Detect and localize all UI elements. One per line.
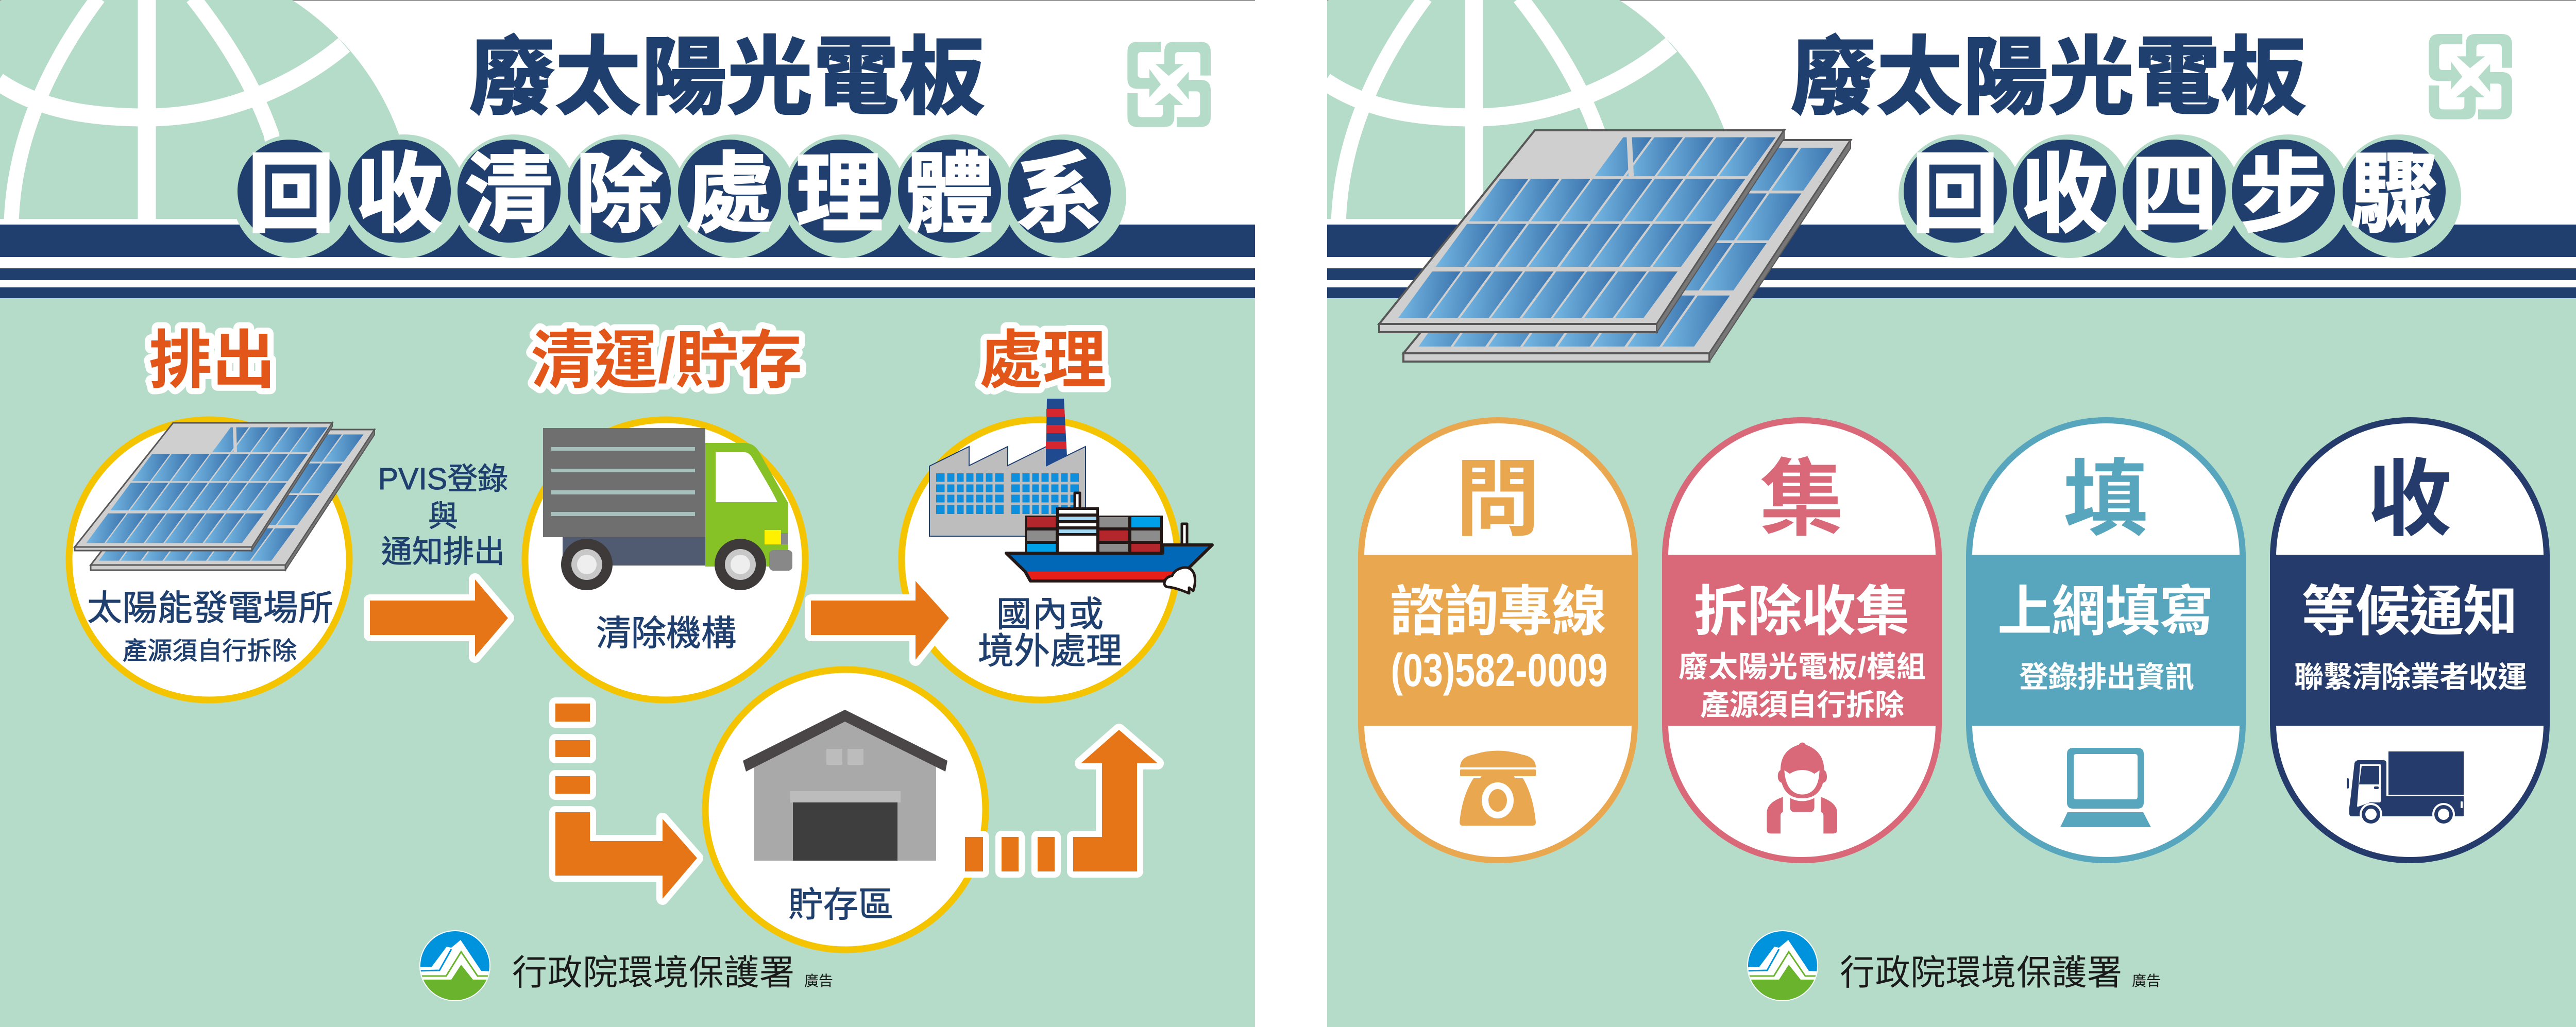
globe background [1206,0,1742,493]
heading: treatment: 處理 [979,326,1106,396]
heading: circular letters: 系 [1015,146,1103,244]
agency name: 行政院環境保護署 [1840,953,2122,992]
label: clearance: 清除機構 [596,614,736,653]
text: PVIS registration [378,462,508,569]
text: PVIS registration: PVIS登錄 [378,462,508,496]
card heading: 等候通知 [2301,581,2518,642]
card: collect (dismantle and collect) [1662,420,1942,860]
node: domestic or overseas treatment [902,399,1212,700]
footer: agency logo and name [1747,930,2161,1002]
icon: EPA logo [1747,930,1819,1002]
heading: circular letters: 處 [686,146,773,244]
heading: circular letters: 回 [1911,146,1999,244]
heading: transport and storage: 清運/貯存 [531,326,802,396]
icon: telephone [1460,751,1536,826]
heading: circular letters: 四 [2130,146,2218,244]
footer: agency logo and name [419,930,833,1002]
label: dismantling note: 產源須自行拆除 [123,638,297,665]
card: ask (consultation hotline) [1358,420,1638,860]
text: PVIS registration: 通知排出 [381,535,505,569]
icon: factory [929,399,1086,536]
step character: 問 [1455,452,1540,546]
panel: four recycling steps poster (right) [1206,0,2576,1027]
node: storage area [705,670,986,950]
heading: circular letters: 體 [906,146,993,244]
heading: circular letters: 步 [2240,146,2327,244]
card heading: 拆除收集 [1693,581,1910,642]
step character: 集 [1759,452,1844,546]
card heading: 諮詢專線 [1390,581,1606,642]
label: plant: 太陽能發電場所 [87,589,333,628]
heading: circular letters: 除 [575,146,663,244]
arrow: dashed route from storage to treatment [965,730,1158,871]
label: domestic: 國內或 [996,595,1104,634]
heading: discharge: 排出 [149,326,276,396]
heading: circular letters: 驟 [2350,146,2438,244]
advertisement mark: 廣告 [2132,973,2161,989]
card heading: 上網填寫 [1997,581,2214,642]
heading: circular letters [232,134,1126,258]
icon: truck [543,428,792,590]
phone number: (03)582-0009 [1391,645,1607,696]
advertisement mark: 廣告 [804,973,833,989]
panel: recycling system poster (left) [0,0,1255,1027]
text: PVIS registration: 與 [428,500,458,533]
globe background [0,0,415,493]
title: 廢太陽光電板 [469,30,985,125]
detail line two: 產源須自行拆除 [1700,689,1904,722]
icon: delivery truck [2347,751,2464,826]
step character: 收 [2367,452,2452,546]
arrow: dashed route to storage [555,704,697,899]
icon: laptop [2060,748,2151,827]
detail line one: 廢太陽光電板/模組 [1679,651,1926,683]
icon: EPA logo [419,930,491,1002]
agency name: 行政院環境保護署 [512,953,794,992]
icon: worker [1767,743,1837,833]
detail line: 聯繫清除業者收運 [2294,661,2527,694]
heading: circular letters: 理 [795,146,883,244]
card: fill in (online registration) [1966,420,2246,860]
heading: circular letters: 收 [2021,146,2108,244]
detail line: 登錄排出資訊 [2019,661,2194,694]
arrow: to treatment [811,581,949,660]
icon: container ship [1006,493,1212,593]
icon: recycling mark [2429,34,2512,119]
node: solar power plant [69,420,375,700]
label: storage: 貯存區 [788,885,893,925]
arrow: to clearance [370,579,508,657]
node: clearance organization [525,420,805,700]
heading: circular letters: 回 [247,146,335,244]
icon: recycling mark [1127,42,1211,127]
title: 廢太陽光電板 [1791,30,2306,125]
card: collect (wait for notice) [2270,420,2550,860]
heading: circular letters: 收 [355,146,443,244]
step character: 填 [2063,452,2148,546]
heading: circular letters [1899,134,2461,258]
label: overseas: 境外處理 [978,631,1122,671]
icon: warehouse [743,710,947,861]
icon: stacked solar panels [75,423,375,570]
heading: circular letters: 清 [465,146,553,244]
icon: large stacked solar panels [1379,130,1851,362]
